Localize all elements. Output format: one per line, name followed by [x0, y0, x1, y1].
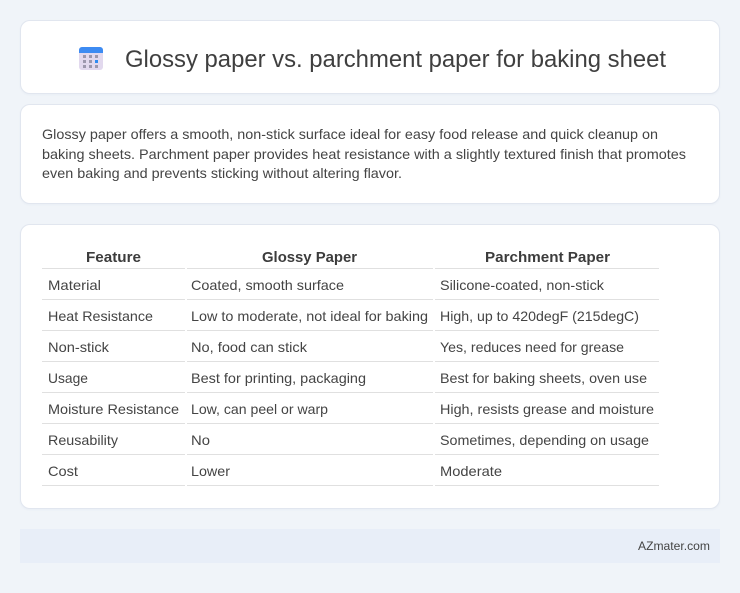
table row: cost: Cost — [48, 463, 78, 479]
table row: usage: Best for baking sheets, oven use — [440, 370, 647, 386]
panel: comparison table — [20, 224, 720, 509]
table row: cost: Lower — [191, 463, 230, 479]
table row: heat resistance: High, up to 420degF (215degC) — [440, 308, 639, 324]
text block: description: baking sheets. Parchment paper provides heat resistance with a slightly textured finish that promotes — [42, 146, 686, 162]
table row: cost — [48, 463, 502, 479]
table row: reusability: Reusability — [48, 432, 118, 448]
table row: usage — [48, 370, 647, 386]
table row: reusability: Sometimes, depending on usage — [440, 432, 649, 448]
text block: description — [42, 126, 686, 181]
table row: non-stick: Yes, reduces need for grease — [440, 339, 624, 355]
title: Glossy paper vs. parchment paper for baking sheet — [125, 46, 666, 73]
table header row — [86, 249, 610, 266]
table row: reusability — [48, 432, 649, 448]
table row: material: Material — [48, 277, 101, 293]
icon: calendar — [79, 47, 103, 70]
table row: heat resistance: Heat Resistance — [48, 308, 153, 324]
table row: material: Coated, smooth surface — [191, 277, 344, 293]
table row: non-stick — [48, 339, 624, 355]
table row: material: Silicone-coated, non-stick — [440, 277, 605, 293]
table header row: Glossy Paper — [262, 249, 357, 266]
table row: usage: Usage — [48, 370, 88, 386]
table row: material — [48, 277, 605, 293]
footer text: AZmater.com — [638, 539, 710, 553]
table row: heat resistance: Low to moderate, not ideal for baking — [191, 308, 428, 324]
table row: usage: Best for printing, packaging — [191, 370, 366, 386]
table row: moisture resistance: Low, can peel or warp — [191, 401, 328, 417]
table row: heat resistance — [48, 308, 639, 324]
table row: reusability: No — [191, 432, 210, 448]
table header row: Parchment Paper — [485, 249, 610, 266]
panel: description — [20, 104, 720, 204]
text block: description: Glossy paper offers a smooth, non-stick surface ideal for easy food release and quick cleanup on — [42, 126, 658, 142]
table row: cost: Moderate — [440, 463, 502, 479]
table row: non-stick: No, food can stick — [191, 339, 308, 355]
table row: moisture resistance: Moisture Resistance — [48, 401, 179, 417]
table row: moisture resistance — [48, 401, 654, 417]
panel: footer — [20, 529, 720, 563]
table header row: Feature — [86, 249, 141, 266]
text block: description: even baking and prevents sticking without altering flavor. — [42, 165, 402, 181]
table row: moisture resistance: High, resists grease and moisture — [440, 401, 654, 417]
panel: header — [20, 20, 720, 94]
table row: non-stick: Non-stick — [48, 339, 110, 355]
